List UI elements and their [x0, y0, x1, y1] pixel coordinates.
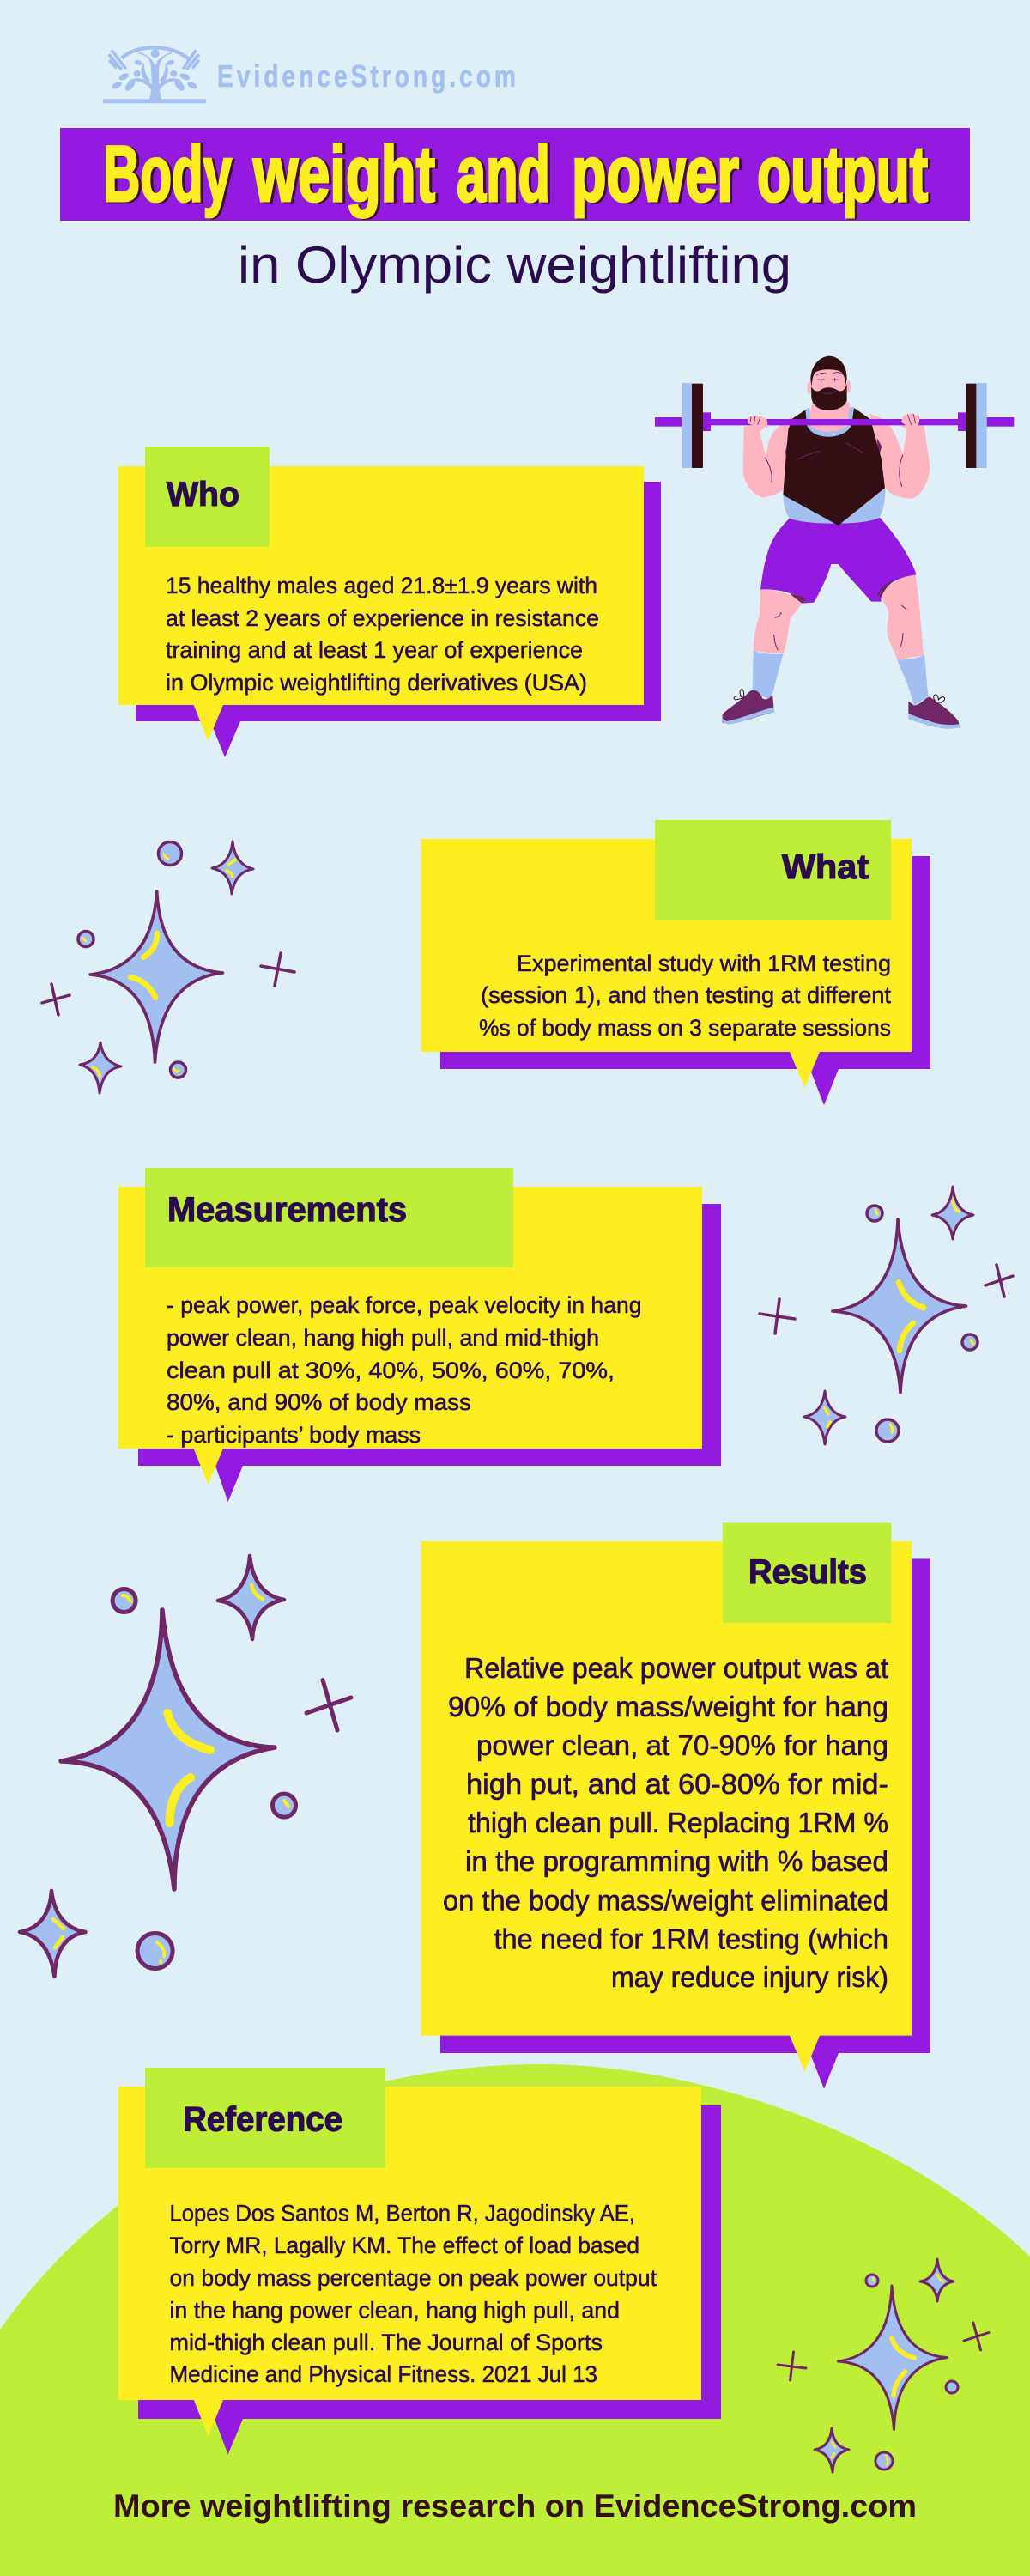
reference body: Torry MR, Lagally KM. The effect of load based: [170, 2233, 639, 2258]
reference body: mid-thigh clean pull. The Journal of Sports: [170, 2330, 603, 2355]
reference heading: Reference: [183, 2100, 342, 2138]
panel: results: [421, 1523, 930, 2089]
measurements body: - peak power, peak force, peak velocity in hang: [167, 1292, 641, 1318]
title banner: and: [457, 131, 550, 218]
socks: [753, 651, 928, 706]
title banner: Body: [103, 131, 232, 218]
panel: measurements: [118, 1168, 721, 1502]
measurements body: - participants’ body mass: [167, 1422, 421, 1448]
measurements heading tab: [145, 1168, 513, 1267]
reference body: Lopes Dos Santos M, Berton R, Jagodinsky AE,: [170, 2200, 635, 2226]
what body: %s of body mass on 3 separate sessions: [479, 1015, 891, 1041]
shoes: [723, 690, 960, 729]
muscle lines: [766, 455, 906, 650]
measurements shadow: [138, 1204, 721, 1502]
who body: training and at least 1 year of experience: [166, 637, 583, 663]
barbell: [655, 383, 1014, 468]
subtitle: in Olympic weightlifting: [238, 236, 791, 294]
results body: in the programming with % based: [465, 1845, 888, 1877]
measurements card: [118, 1187, 702, 1485]
neck and head: [807, 356, 852, 434]
reference body: on body mass percentage on peak power output: [170, 2265, 657, 2291]
results heading tab: [723, 1523, 891, 1623]
what heading: What: [782, 848, 869, 886]
measurements body: [167, 1292, 641, 1448]
icon: weightlifter: [655, 356, 1014, 729]
results body: the need for 1RM testing (which: [494, 1923, 888, 1954]
footer call to action: More weightlifting research on EvidenceStrong.com: [113, 2488, 917, 2524]
hands: [748, 414, 920, 428]
results heading: Results: [748, 1553, 867, 1591]
panel: reference: [118, 2068, 721, 2454]
icon: sparkles left of results: [20, 1556, 351, 1977]
panel: what: [421, 820, 930, 1105]
what body: Experimental study with 1RM testing: [517, 951, 891, 976]
reference heading tab: [145, 2068, 385, 2168]
title banner: [60, 128, 970, 221]
what card: [421, 839, 912, 1088]
green hill background: [0, 2064, 1030, 2576]
shorts shading: [790, 580, 895, 604]
icon: sparkles left of what: [42, 841, 294, 1093]
reference body: in the hang power clean, hang high pull, and: [170, 2298, 620, 2324]
what body: (session 1), and then testing at different: [481, 982, 892, 1008]
who body: [166, 573, 599, 696]
reference body: [170, 2200, 657, 2387]
reference body: Medicine and Physical Fitness. 2021 Jul 13: [170, 2361, 597, 2387]
who shadow: [136, 482, 661, 757]
results body: thigh clean pull. Replacing 1RM %: [468, 1807, 888, 1838]
reference card: [118, 2087, 701, 2436]
results body: on the body mass/weight eliminated: [443, 1884, 888, 1917]
results body: may reduce injury risk): [611, 1961, 888, 1993]
results body: power clean, at 70-90% for hang: [476, 1729, 888, 1761]
measurements heading: Measurements: [167, 1191, 407, 1229]
title banner: power: [572, 131, 739, 218]
results body: high put, and at 60-80% for mid-: [466, 1768, 888, 1800]
title banner: weight: [252, 131, 435, 218]
tank top: [783, 407, 886, 526]
who body: 15 healthy males aged 21.8±1.9 years with: [166, 573, 597, 598]
legs: [754, 574, 924, 659]
logo: [104, 47, 519, 103]
results shadow: [440, 1559, 930, 2089]
arms: [743, 414, 930, 499]
measurements body: clean pull at 30%, 40%, 50%, 60%, 70%,: [167, 1358, 615, 1383]
icon: sparkles right of measurements: [760, 1187, 1013, 1444]
what body: [479, 951, 892, 1041]
measurements body: power clean, hang high pull, and mid-thigh: [167, 1325, 599, 1351]
what shadow: [440, 856, 930, 1105]
what heading tab: [655, 820, 891, 920]
results body: [443, 1652, 888, 1993]
shorts: [760, 518, 917, 604]
who body: at least 2 years of experience in resistance: [166, 605, 599, 631]
reference shadow: [138, 2105, 721, 2454]
who body: in Olympic weightlifting derivatives (USA): [166, 670, 587, 696]
who heading: Who: [167, 476, 239, 513]
results body: Relative peak power output was at: [464, 1652, 888, 1684]
results body: 90% of body mass/weight for hang: [448, 1691, 888, 1722]
panel: who: [118, 447, 661, 757]
who heading tab: [145, 447, 270, 547]
results card: [421, 1541, 912, 2072]
logo: EvidenceStrong.com: [217, 58, 519, 94]
title banner: output: [757, 131, 928, 218]
measurements body: 80%, and 90% of body mass: [167, 1389, 471, 1415]
who card: [118, 466, 644, 741]
icon: sparkles right of reference: [778, 2259, 989, 2472]
